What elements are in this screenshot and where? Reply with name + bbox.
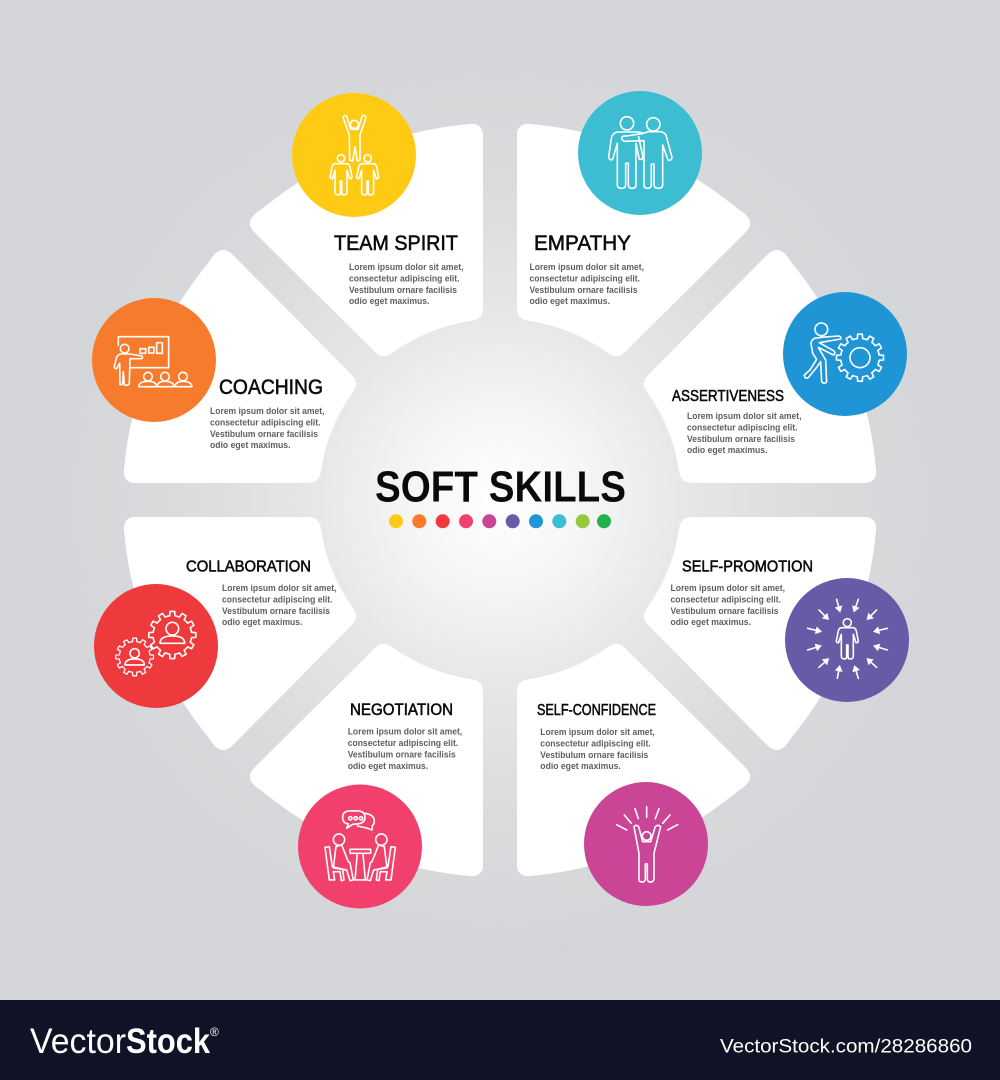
- body text: [210, 406, 325, 451]
- badge: red circle: [94, 584, 218, 708]
- panel shape: [644, 250, 876, 483]
- panel: collaboration: [94, 517, 356, 750]
- badge: pink circle: [298, 784, 422, 908]
- panel shape: [124, 250, 356, 483]
- badge: orange circle: [92, 298, 216, 422]
- footer bar: [0, 1000, 1000, 1080]
- icon: person pushing gear: [804, 323, 884, 383]
- heading: team spirit: TEAM SPIRIT: [334, 232, 458, 255]
- body text: Lorem ipsum dolor sit amet,: [222, 583, 337, 594]
- icon: presenter at board: [114, 337, 192, 387]
- panel: self-confidence: [517, 644, 750, 906]
- icon: person with raised arms: [617, 807, 678, 882]
- heading: empathy: EMPATHY: [534, 232, 631, 255]
- body text: Vestibulum ornare facilisis: [210, 429, 318, 440]
- body text: [540, 727, 655, 772]
- body text: Vestibulum ornare facilisis: [670, 606, 778, 617]
- body text: Lorem ipsum dolor sit amet,: [210, 406, 325, 417]
- heading: self-confidence: SELF-CONFIDENCE: [537, 702, 656, 719]
- body text: odio eget maximus.: [530, 296, 610, 307]
- body text: Vestibulum ornare facilisis: [687, 434, 795, 445]
- body text: [348, 727, 462, 772]
- footer image id: VectorStock.com/28286860: [720, 1037, 972, 1058]
- footer logo: VectorStock: [30, 1022, 221, 1061]
- body text: consectetur adipiscing elit.: [687, 422, 798, 433]
- body text: odio eget maximus.: [540, 761, 621, 772]
- icon: arm around shoulder: [609, 117, 672, 188]
- body text: [670, 583, 785, 628]
- body text: odio eget maximus.: [222, 617, 302, 628]
- body text: odio eget maximus.: [348, 761, 428, 772]
- body text: Vestibulum ornare facilisis: [349, 285, 457, 296]
- badge: magenta circle: [584, 782, 708, 906]
- footer logo: ®: [210, 1025, 219, 1039]
- body text: Lorem ipsum dolor sit amet,: [687, 411, 802, 422]
- body text: [687, 411, 802, 456]
- panel: empathy: [517, 91, 750, 356]
- panel: assertiveness: [644, 250, 907, 483]
- badge: purple circle: [785, 578, 909, 702]
- body text: odio eget maximus.: [349, 296, 430, 307]
- panel: coaching: [92, 250, 356, 483]
- icon: people in gears: [115, 611, 196, 676]
- body text: consectetur adipiscing elit.: [670, 594, 781, 605]
- icon: two people talking at table: [325, 811, 395, 881]
- body text: Vestibulum ornare facilisis: [222, 606, 330, 617]
- body text: consectetur adipiscing elit.: [222, 594, 332, 605]
- panel shape: [124, 517, 356, 750]
- heading: negotiation: NEGOTIATION: [350, 701, 453, 719]
- body text: odio eget maximus.: [670, 617, 751, 628]
- panel shape: [517, 124, 750, 356]
- heading: collaboration: COLLABORATION: [186, 558, 311, 576]
- panel shape: [250, 644, 483, 876]
- body text: [222, 583, 337, 628]
- body text: Lorem ipsum dolor sit amet,: [348, 727, 462, 738]
- body text: consectetur adipiscing elit.: [348, 738, 458, 749]
- body text: odio eget maximus.: [210, 440, 290, 451]
- body text: Vestibulum ornare facilisis: [348, 750, 456, 760]
- body text: Lorem ipsum dolor sit amet,: [349, 262, 464, 273]
- colour dots row: [389, 514, 611, 528]
- body text: [349, 262, 464, 307]
- body text: [530, 262, 644, 307]
- heading: self-promotion: SELF-PROMOTION: [682, 558, 813, 576]
- body text: consectetur adipiscing elit.: [540, 738, 651, 749]
- body text: Lorem ipsum dolor sit amet,: [540, 727, 655, 738]
- icon: team pyramid: [330, 115, 379, 195]
- badge: yellow circle: [292, 93, 416, 217]
- body text: Vestibulum ornare facilisis: [530, 285, 638, 296]
- icon: person with inward arrows: [808, 599, 887, 678]
- body text: odio eget maximus.: [687, 445, 768, 456]
- body text: consectetur adipiscing elit.: [530, 273, 640, 284]
- panel shape: [517, 644, 750, 876]
- panel shape: [250, 124, 483, 356]
- panel: self-promotion: [644, 517, 909, 750]
- panel shape: [644, 517, 876, 750]
- title: SOFT SKILLS: [375, 463, 626, 512]
- badge: teal circle: [578, 91, 702, 215]
- body text: consectetur adipiscing elit.: [349, 273, 460, 284]
- badge: blue circle: [783, 292, 907, 416]
- body text: Lorem ipsum dolor sit amet,: [530, 262, 644, 273]
- panel: team spirit: [250, 93, 483, 356]
- heading: assertiveness: ASSERTIVENESS: [672, 388, 784, 405]
- body text: Lorem ipsum dolor sit amet,: [670, 583, 785, 594]
- body text: Vestibulum ornare facilisis: [540, 750, 648, 761]
- body text: consectetur adipiscing elit.: [210, 417, 320, 428]
- panel: negotiation: [250, 644, 483, 908]
- heading: coaching: COACHING: [219, 376, 323, 399]
